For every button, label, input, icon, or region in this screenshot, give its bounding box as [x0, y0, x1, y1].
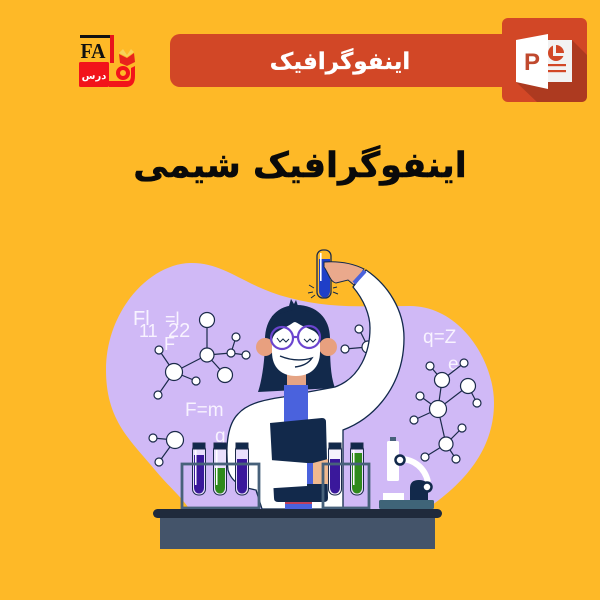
- test tubes: right: [328, 443, 364, 495]
- hand holding clipboard: [313, 459, 329, 484]
- icon: PowerPoint: [502, 18, 587, 102]
- smile: [280, 356, 312, 367]
- formula labels: =l: [165, 309, 180, 329]
- microscope: [379, 437, 434, 509]
- clipboard: [270, 418, 328, 502]
- formula labels: F: [164, 334, 175, 354]
- formula labels: q=Z: [423, 327, 457, 348]
- formula labels: e: [448, 354, 459, 375]
- formula labels: 11: [139, 321, 158, 341]
- held test tube: [308, 250, 338, 298]
- shirt: [284, 385, 308, 423]
- formula labels: Fl: [133, 308, 150, 330]
- neck: [287, 370, 306, 387]
- logo: FA dars: درس: [82, 71, 106, 82]
- rack: right: [323, 464, 369, 508]
- forearm: [257, 424, 307, 489]
- ears: [256, 338, 337, 356]
- formula labels: 22: [168, 320, 190, 342]
- formula labels: q: [215, 426, 226, 447]
- test tubes: left: [192, 443, 248, 495]
- raised cuff: [354, 271, 365, 283]
- lab coat and raised arm: [227, 270, 404, 509]
- logo: FA dars: FA: [80, 39, 106, 63]
- molecule: lower left: [149, 432, 184, 466]
- glasses: [271, 326, 320, 349]
- rack: left: [182, 464, 259, 508]
- molecule: right: [410, 359, 481, 463]
- shirt hem: [285, 502, 312, 509]
- background blob: [106, 263, 494, 510]
- eyes: [277, 338, 316, 342]
- molecule: behind arm: [341, 325, 374, 353]
- formula labels: F=m: [185, 400, 224, 421]
- hair: [258, 305, 335, 392]
- raised hand: [324, 262, 364, 285]
- banner: category label: اینفوگرافیک: [270, 48, 410, 75]
- hair fringe: [270, 308, 324, 340]
- title: اینفوگرافیک شیمی: [133, 145, 467, 186]
- cuff: [307, 463, 313, 484]
- face with mask: [272, 322, 320, 376]
- logo: FA dars: [79, 35, 135, 87]
- hair tuft: [289, 299, 298, 306]
- icon: PowerPoint: P: [524, 49, 540, 76]
- scientist: [227, 262, 404, 509]
- table: [153, 509, 442, 549]
- banner: category label: [170, 34, 515, 87]
- molecule: upper left: [154, 312, 250, 399]
- formula labels: [133, 308, 459, 447]
